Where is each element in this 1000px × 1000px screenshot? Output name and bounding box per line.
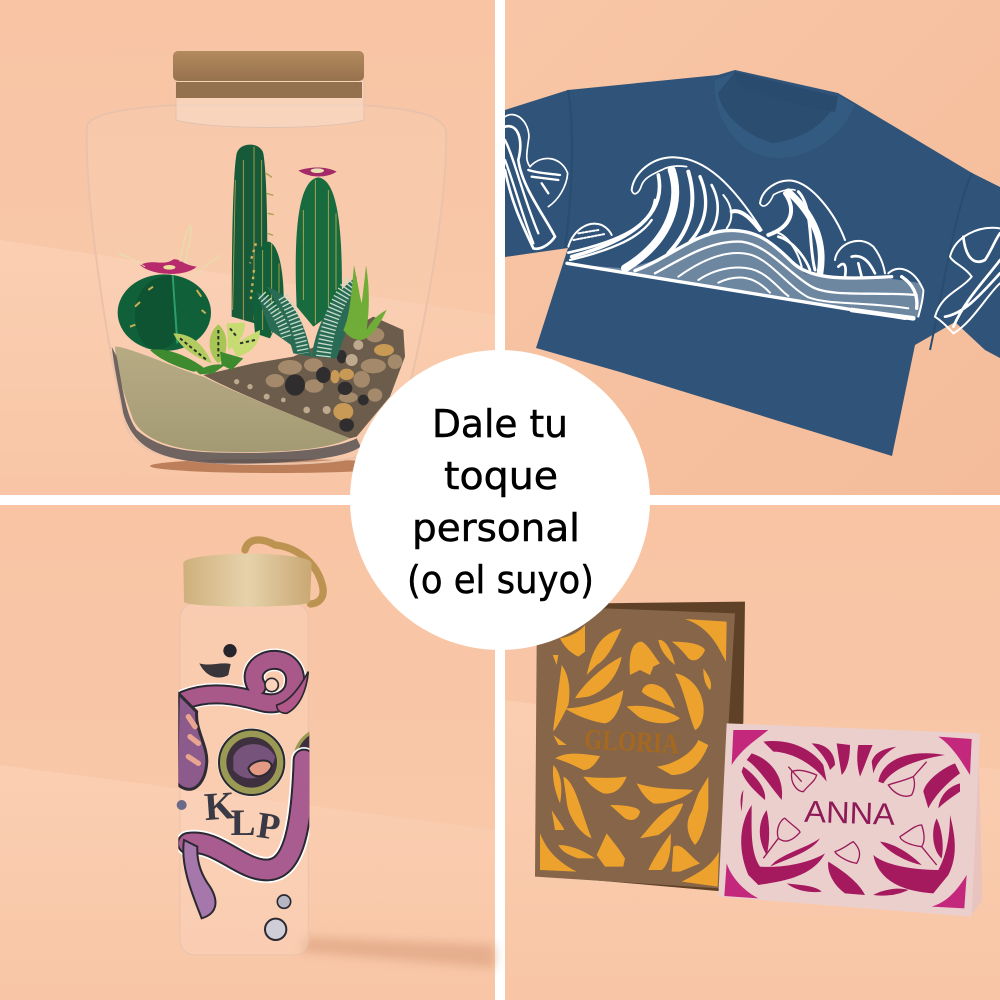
panel: water bottle <box>0 505 495 1000</box>
icon: bottle: L <box>231 803 256 844</box>
icon: bamboo lid <box>183 554 312 607</box>
icon: striped leaves <box>257 277 357 358</box>
icon: right cactus with flower <box>296 168 342 327</box>
icon: bottle: P <box>254 805 283 849</box>
card: ANNA <box>718 723 982 917</box>
card name GLORIA: GLORIA <box>584 724 680 760</box>
icon: patterned leaves <box>150 323 260 374</box>
icon: navy t-shirt <box>505 70 1000 456</box>
icon: small cactus <box>250 242 284 338</box>
wave print <box>505 115 1000 333</box>
white centre circle <box>350 350 650 650</box>
heading <box>407 402 594 602</box>
flower outlines <box>763 762 937 865</box>
glass base <box>112 347 361 464</box>
heading: toque <box>444 454 558 498</box>
bottle initials: K <box>203 783 237 829</box>
terrarium plants and soil <box>112 145 405 464</box>
icon: rope loop <box>245 540 323 604</box>
heading: Dale tu <box>432 402 568 446</box>
icon: glass jar <box>87 51 446 464</box>
sticker shapes <box>177 644 291 940</box>
card name ANNA: ANNA <box>804 795 896 832</box>
heading: (o el suyo) <box>407 558 594 602</box>
icon: cork lid <box>173 51 364 98</box>
card: GLORIA <box>535 602 745 892</box>
left arc tentacle <box>177 693 207 789</box>
lower tentacle <box>188 760 304 870</box>
icon: grass <box>343 265 387 340</box>
top tentacle <box>185 660 295 703</box>
right porthole <box>294 732 310 752</box>
icon: tall cactus <box>232 145 274 327</box>
panel: greeting cards <box>505 505 1000 1000</box>
panel: t-shirt <box>505 0 1000 495</box>
right sleeve waves <box>935 228 1000 333</box>
icon: barrel cactus with flower <box>118 225 222 351</box>
pebbles <box>203 317 405 438</box>
icon: bottle <box>176 536 327 956</box>
sand <box>115 347 350 452</box>
octopus stickers <box>178 648 310 920</box>
heading: personal <box>412 506 580 550</box>
left sleeve waves <box>505 115 568 249</box>
centre porthole <box>217 728 286 797</box>
panel: terrarium <box>0 0 495 495</box>
